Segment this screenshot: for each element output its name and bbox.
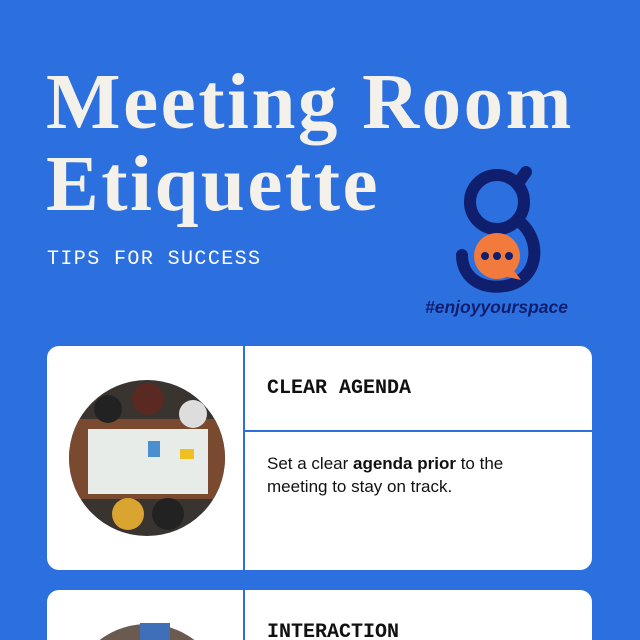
photo circle xyxy=(69,380,225,536)
heading: CLEAR AGENDA xyxy=(267,377,411,400)
title: Etiquette xyxy=(46,141,380,228)
panel: clear agenda xyxy=(47,346,592,570)
subtitle: TIPS FOR SUCCESS xyxy=(47,248,261,271)
title: Meeting Room xyxy=(46,59,574,146)
text: Set a clear agenda prior to the meeting to stay on track. xyxy=(267,454,503,496)
photo circle xyxy=(100,623,194,640)
logo xyxy=(425,166,568,317)
panel: interaction xyxy=(47,590,592,640)
logo: #enjoyyourspace xyxy=(425,297,568,317)
title xyxy=(46,59,574,228)
